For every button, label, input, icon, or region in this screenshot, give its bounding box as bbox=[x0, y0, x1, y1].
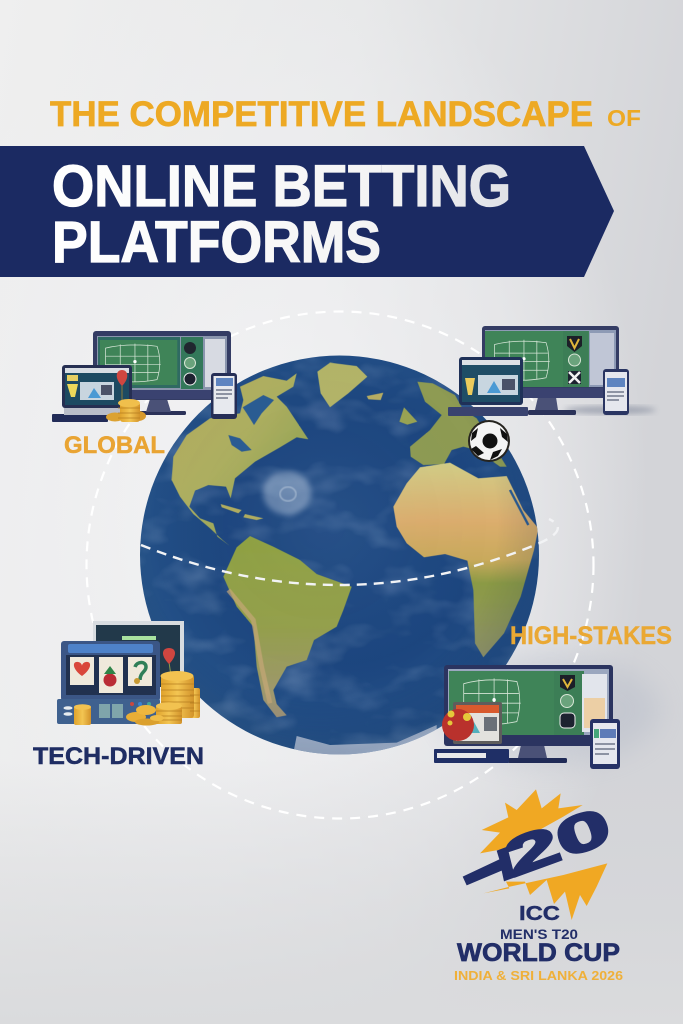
title banner bbox=[0, 146, 614, 277]
monitor bbox=[91, 331, 231, 415]
Britain bbox=[399, 407, 417, 425]
reel: heart bbox=[70, 657, 94, 685]
dashed equator line bbox=[141, 519, 558, 585]
reel: fruit bbox=[99, 657, 123, 693]
desk shadow bbox=[564, 406, 656, 414]
device group: tech-driven slot machine bbox=[57, 621, 200, 726]
title line: OF bbox=[607, 105, 641, 131]
coin stacks bbox=[74, 671, 200, 726]
laptop base bbox=[434, 749, 509, 763]
laptop bbox=[448, 357, 528, 416]
monitor bbox=[444, 665, 613, 763]
dashed orbit ring bbox=[86, 312, 594, 818]
Caribbean islands bbox=[221, 504, 263, 520]
Antarctica bbox=[294, 725, 437, 754]
phone bbox=[603, 369, 629, 415]
Iceland bbox=[367, 393, 383, 400]
logo text: host line: INDIA & SRI LANKA 2026 bbox=[454, 969, 623, 983]
slot machine bbox=[57, 641, 160, 724]
logo bat handle bbox=[463, 847, 515, 885]
globe bbox=[140, 355, 540, 770]
tablet bbox=[453, 702, 502, 744]
title line: THE COMPETITIVE LANDSCAPE bbox=[50, 95, 593, 134]
logo lightning, lower bbox=[483, 863, 607, 920]
logo text: ICC: ICC bbox=[519, 903, 560, 925]
icon: soccer ball bbox=[468, 420, 510, 462]
Hudson Bay and Great Lakes bbox=[228, 395, 274, 452]
title banner: PLATFORMS bbox=[52, 210, 381, 275]
back monitor bbox=[93, 621, 184, 687]
label: global: GLOBAL bbox=[64, 432, 165, 459]
device group: global bbox=[52, 331, 237, 422]
device group: high-stakes bbox=[434, 665, 620, 769]
laptop bbox=[52, 365, 132, 422]
title banner: ONLINE BETTING bbox=[52, 154, 511, 219]
logo text: world cup: WORLD CUP bbox=[457, 939, 620, 967]
Andes ridge bbox=[228, 590, 270, 703]
device group: top right bbox=[448, 326, 656, 416]
Red Sea bbox=[510, 490, 528, 525]
Africa bbox=[393, 463, 538, 657]
coins bbox=[106, 399, 146, 422]
red ball bbox=[442, 709, 474, 741]
map pin bbox=[117, 370, 127, 400]
phone bbox=[211, 373, 237, 419]
Europe bbox=[410, 382, 507, 467]
logo numerals: 20 bbox=[497, 797, 619, 888]
label: high-stakes: HIGH-STAKES bbox=[510, 622, 672, 650]
map pin bbox=[163, 648, 175, 676]
monitor bbox=[482, 326, 619, 415]
South America bbox=[223, 536, 352, 717]
reel: symbol bbox=[128, 657, 152, 686]
logo lightning, upper bbox=[480, 789, 583, 853]
label: tech-driven: TECH-DRIVEN bbox=[33, 743, 204, 770]
logo: ICC men's T20 World Cup bbox=[454, 789, 623, 983]
Greenland bbox=[317, 363, 367, 407]
haze behind lower right devices bbox=[440, 655, 660, 765]
North America bbox=[172, 373, 308, 546]
logo text: men's T20: MEN'S T20 bbox=[500, 927, 578, 942]
phone bbox=[590, 719, 620, 769]
